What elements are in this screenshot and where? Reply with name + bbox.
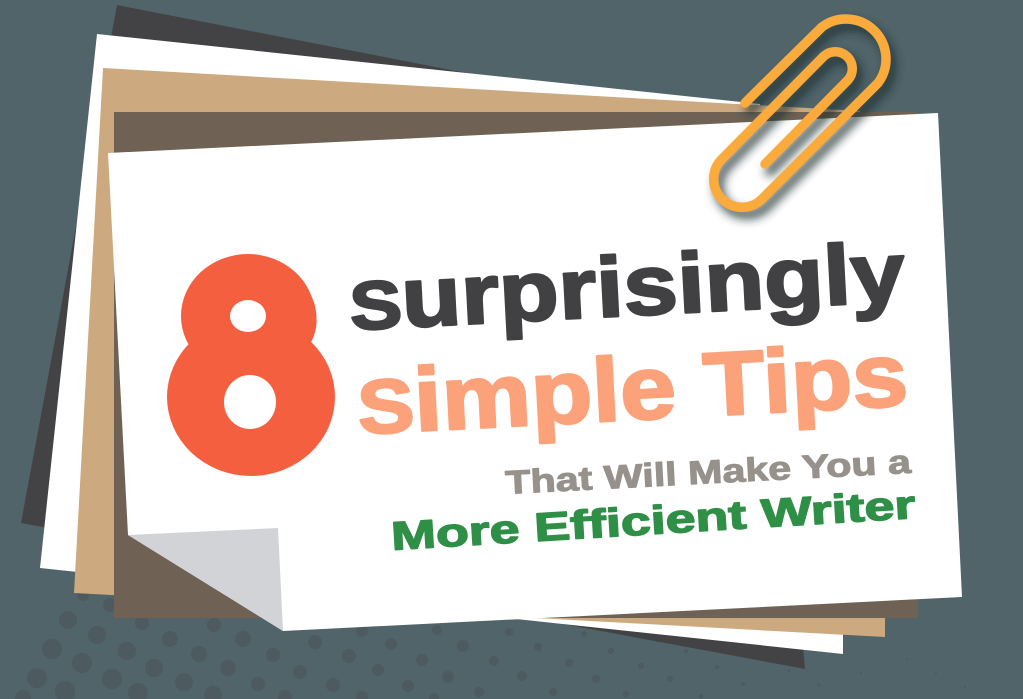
heading: Surprisingly: Surprisingly: [347, 225, 907, 349]
paper: brown sheet: [114, 112, 918, 618]
numeral 8: 8: [172, 210, 330, 528]
paper: dark sheet: [21, 5, 805, 669]
subheading: More Efficient Writer: More Efficient Writer: [390, 483, 917, 559]
folded corner: [128, 528, 283, 631]
paperclip shadow: [719, 26, 891, 214]
paper: front white sheet: [108, 113, 962, 631]
paperclip: [714, 19, 886, 207]
heading: Simple Tips: Simple Tips: [355, 325, 910, 454]
dot pattern: [15, 589, 966, 699]
paper: white back sheet: [40, 34, 843, 654]
clip back wire: [745, 27, 822, 103]
subheading: That Will Make You a: That Will Make You a: [504, 443, 913, 501]
paper: tan sheet: [74, 68, 885, 637]
